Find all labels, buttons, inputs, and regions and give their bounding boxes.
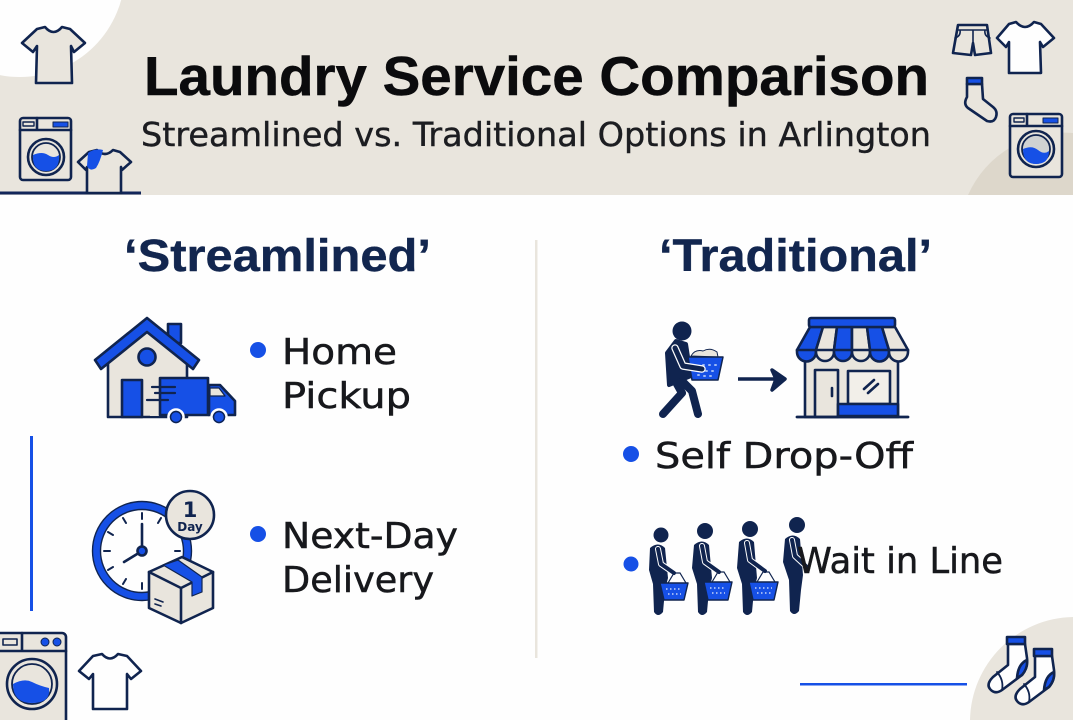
bullet: self drop-off bbox=[623, 446, 639, 462]
bullet: home pickup bbox=[250, 342, 266, 358]
icon: pair of socks bbox=[989, 637, 1054, 704]
icon: washing machine top left bbox=[20, 118, 71, 180]
label: home pickup: Home bbox=[282, 332, 397, 373]
icon: clock with one day badge and parcel bbox=[92, 491, 214, 623]
bullet: wait in line bbox=[624, 556, 638, 572]
label: next-day delivery: Delivery bbox=[282, 560, 434, 601]
icon: white t-shirt top right bbox=[997, 22, 1054, 73]
icon: t-shirt top left bbox=[22, 27, 85, 83]
label: next-day delivery bbox=[282, 516, 458, 601]
label: next-day delivery: Next-Day bbox=[282, 516, 458, 557]
label: home pickup bbox=[282, 332, 411, 417]
person three bbox=[737, 521, 778, 615]
icon: t-shirt bottom left bbox=[79, 654, 141, 709]
label: self drop-off: Self Drop-Off bbox=[655, 436, 914, 477]
icon: house with delivery truck bbox=[95, 318, 235, 424]
title: Laundry Service Comparison bbox=[144, 45, 929, 107]
divider between columns bbox=[535, 240, 538, 658]
person two bbox=[692, 523, 732, 615]
accent line: left bbox=[30, 436, 33, 611]
decorative corner circle bbox=[970, 617, 1073, 720]
accent line: bottom bbox=[800, 683, 967, 686]
icon: queue of people with baskets bbox=[649, 517, 808, 615]
icon: person carrying laundry basket bbox=[663, 322, 723, 414]
label: home pickup: Pickup bbox=[282, 376, 411, 417]
icon: washing machine top right bbox=[1010, 114, 1062, 177]
person four bbox=[783, 517, 808, 614]
heading: streamlined: ‘Streamlined’ bbox=[124, 230, 431, 281]
subtitle: Streamlined vs. Traditional Options in Arlington bbox=[141, 115, 931, 154]
icon: shorts bbox=[953, 25, 991, 55]
icon: clock with one day badge and parcel: Day bbox=[177, 520, 203, 534]
icon: clock with one day badge and parcel: 1 bbox=[183, 498, 197, 522]
bullet: next-day delivery bbox=[250, 526, 266, 542]
person one bbox=[649, 528, 688, 615]
header band bbox=[0, 0, 1073, 195]
heading: traditional: ‘Traditional’ bbox=[659, 230, 932, 281]
icon: washing machine bottom left bbox=[0, 633, 66, 720]
arrow: to shop bbox=[738, 370, 785, 390]
icon: t-shirt on hanger bbox=[78, 149, 131, 193]
icon: sock top right bbox=[965, 78, 997, 122]
label: wait in line: Wait in Line bbox=[797, 541, 1003, 582]
icon: laundry shop bbox=[797, 318, 908, 417]
